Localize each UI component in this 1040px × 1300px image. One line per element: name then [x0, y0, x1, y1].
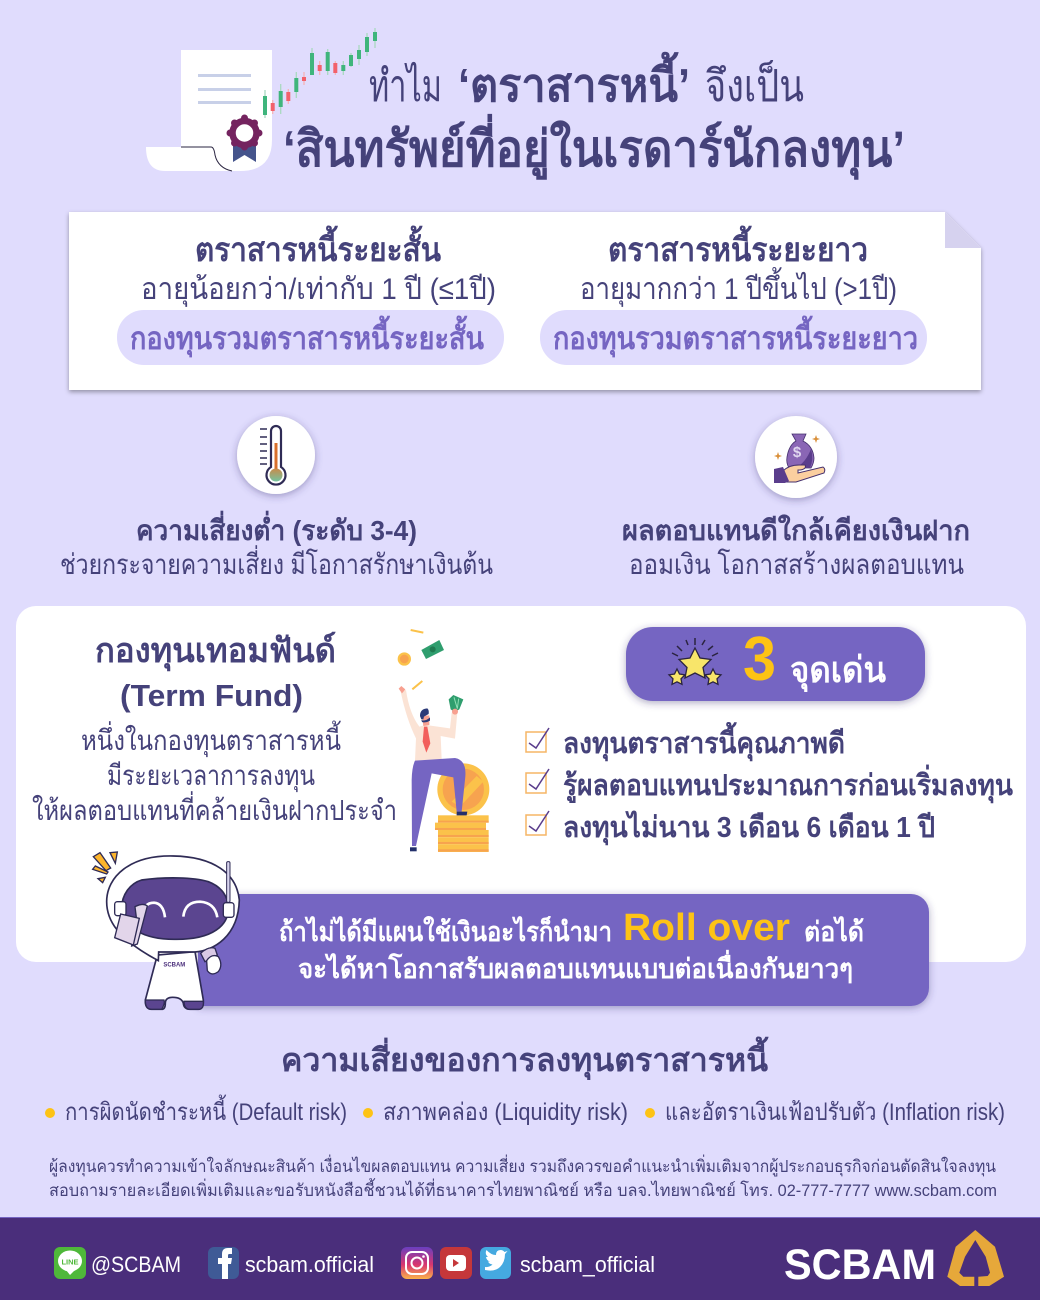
return text [622, 514, 970, 580]
title: ‘สินทรัพย์ที่อยู่ในเรดาร์นักลงทุน’ [283, 114, 905, 180]
illustration: man with coins and money [398, 630, 489, 852]
callout: roll over: Roll over [623, 907, 790, 949]
icon: instagram [401, 1247, 433, 1279]
panel: term fund [16, 606, 1026, 962]
long-term bond: กองทุนรวมตราสารหนี้ระยะยาว [553, 315, 918, 358]
icon: facebook [208, 1247, 239, 1279]
icon: stars [669, 638, 721, 684]
illustration: robot mascot: SCBAM [163, 962, 185, 968]
checklist [526, 721, 1013, 845]
badge: 3 highlights [626, 625, 925, 701]
panel: bond types [69, 212, 981, 390]
term fund description: มีระยะเวลาการลงทุน [107, 760, 315, 793]
risk list: สภาพคล่อง (Liquidity risk) [383, 1099, 628, 1126]
badge: 3 highlights: จุดเด่น [790, 649, 886, 693]
icon: youtube [440, 1247, 472, 1279]
footer: scbam_official [520, 1252, 655, 1277]
callout: roll over: จะได้หาโอกาสรับผลตอบแทนแบบต่อเนื่องกันยาวๆ [298, 949, 853, 984]
heading: bond risks: ความเสี่ยงของการลงทุนตราสารหนี้ [281, 1036, 769, 1081]
long-term bond [540, 225, 927, 365]
short-term bond [117, 225, 504, 365]
long-term bond: อายุมากกว่า 1 ปีขึ้นไป (>1ปี) [580, 267, 897, 308]
logo: SCBAM: SCBAM [784, 1241, 936, 1289]
term fund description: ให้ผลตอบแทนที่คล้ายเงินฝากประจำ [32, 791, 397, 826]
risk list: การผิดนัดชำระหนี้ (Default risk) [65, 1094, 347, 1126]
title: ทำไม [369, 61, 442, 111]
callout: roll over [198, 894, 929, 1006]
return text: ผลตอบแทนดีใกล้เคียงเงินฝาก [622, 514, 970, 546]
low risk text: ความเสี่ยงต่ำ (ระดับ 3-4) [136, 510, 417, 546]
check item 1: ลงทุนตราสารนี้คุณภาพดี [563, 721, 845, 761]
long-term bond: ตราสารหนี้ระยะยาว [608, 225, 868, 268]
title: ‘ตราสารหนี้’ [458, 51, 690, 111]
low risk text: ช่วยกระจายความเสี่ยง มีโอกาสรักษาเงินต้น [60, 545, 493, 580]
footer: @SCBAM [91, 1252, 181, 1277]
short-term bond: ตราสารหนี้ระยะสั้น [195, 225, 441, 268]
term fund description: หนึ่งในกองทุนตราสารหนี้ [81, 720, 341, 758]
badge: 3 highlights: 3 [743, 625, 776, 694]
footer: scbam.official [245, 1252, 374, 1277]
icon: money bag in hand [755, 416, 837, 498]
check item 3: ลงทุนไม่นาน 3 เดือน 6 เดือน 1 ปี [563, 810, 935, 845]
return text: ออมเงิน โอกาสสร้างผลตอบแทน [629, 548, 964, 580]
callout: roll over: ต่อได้ [804, 916, 864, 947]
icon: thermometer [237, 416, 315, 494]
icon: money bag in hand: $ [793, 444, 802, 461]
risk list [45, 1094, 1005, 1126]
disclaimer [49, 1154, 997, 1200]
short-term bond: อายุน้อยกว่า/เท่ากับ 1 ปี (≤1ปี) [141, 273, 496, 308]
low risk text [60, 510, 493, 580]
callout: roll over: ถ้าไม่ได้มีแผนใช้เงินอะไรก็นำมา [279, 914, 612, 947]
term fund description [32, 631, 397, 826]
icon: twitter [480, 1247, 511, 1279]
term fund description: (Term Fund) [120, 678, 303, 713]
check item 1 [526, 721, 845, 761]
title: จึงเป็น [705, 60, 804, 111]
disclaimer: สอบถามรายละเอียดเพิ่มเติมและขอรับหนังสือชี้ชวนได้ที่ธนาคารไทยพาณิชย์ หรือ บลจ.ไทยพาณิชย์ โทร. 02-777-7777 www.scbam.com [49, 1178, 997, 1200]
title [283, 51, 905, 180]
short-term bond: กองทุนรวมตราสารหนี้ระยะสั้น [130, 315, 484, 358]
illustration: robot mascot [93, 852, 239, 1009]
illustration: certificate with candlestick chart [146, 28, 377, 171]
logo: SCBAM [784, 1230, 1004, 1289]
footer [0, 1217, 1040, 1300]
icon: line [54, 1247, 86, 1279]
term fund description: กองทุนเทอมฟันด์ [95, 631, 336, 672]
icon: line: LINE [61, 1258, 79, 1266]
